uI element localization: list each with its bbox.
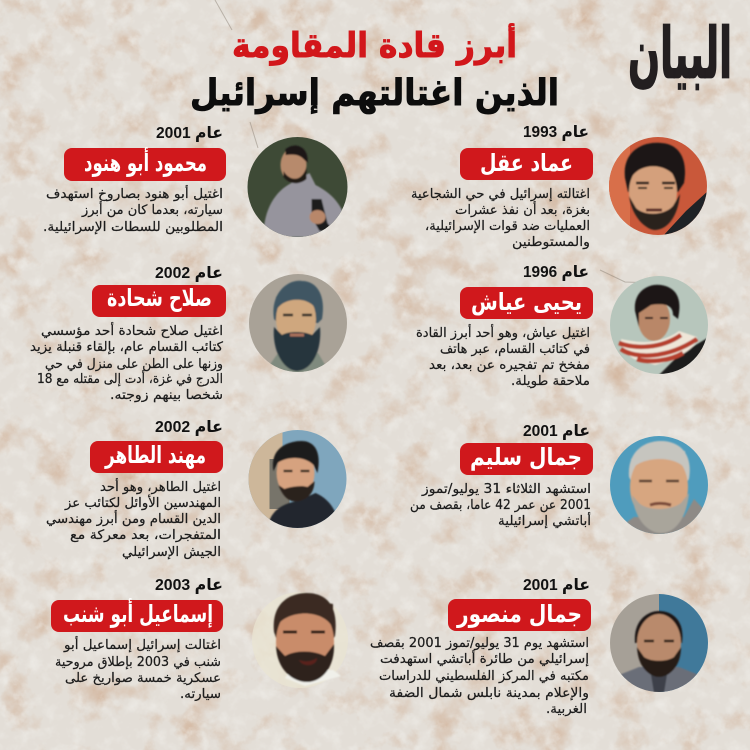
name badge: محمود أبو هنود [84,147,207,177]
title line 1: أبرز قادة المقاومة [232,23,517,66]
description [410,482,591,529]
description: والإعلام بمدينة نابلس شمال الضفة [389,686,589,701]
portrait: Ismail Abu Shanab [252,592,348,688]
portrait: Salah Shehade [248,273,348,373]
description: اغتالت إسرائيل إسماعيل أبو [63,636,221,653]
description: عسكرية خمسة صواريخ على [65,671,221,686]
description: مفخخ تم تفجيره عن بعد، بعد [429,358,590,373]
panel: Imad Aql [411,124,708,250]
name badge: جمال منصور [456,600,582,628]
description [370,636,589,717]
description: سيارته. [180,687,221,702]
year: عام 2002 [155,419,223,436]
portrait: Mahmoud Abu Hanoud [246,136,348,238]
name badge: يحيى عياش [471,288,582,316]
portrait: Imad Aql [608,136,708,236]
year: عام 1996 [523,264,589,281]
name badge [51,598,223,632]
portrait: Yahya Ayyash [609,275,709,375]
description: إسرائيلي من طائرة أباتشي استهدفت [380,650,589,667]
description: في كتائب القسام، عبر هاتف [440,342,590,357]
description: الغربية. [546,702,587,717]
description: الدرج في غزة، أدت إلى مقتله مع 18 [37,370,223,387]
description: كتائب القسام عام، بإلقاء قنبلة يزيد [30,340,224,355]
name badge: عماد عقل [480,149,573,177]
panel: Yahya Ayyash [416,264,709,389]
name badge: جمال سليم [470,443,582,471]
description [43,185,223,235]
panel: Salah Shehade [30,265,348,403]
year: عام 1993 [523,124,589,141]
panel: Jamal Mansour [370,577,709,717]
panel: Ismail Abu Shanab [51,577,348,702]
description: استشهد يوم 31 يوليو/تموز 2001 بقصف [370,636,589,651]
name badge: إسماعيل أبو شنب [63,598,213,628]
panel: Muhannad al-Taher [46,419,348,560]
logo: Al Bayan: البيان [628,13,732,94]
description: ملاحقة طويلة. [511,374,590,389]
description: المهندسين الأوائل لكتائب عز [64,494,221,511]
panel: Mahmoud Abu Hanoud [43,125,348,238]
description: شنب في 2003 بإطلاق مروحية [55,655,221,670]
name badge: صلاح شحادة [107,284,212,312]
description [411,187,590,250]
description: سيارته، بعدما كان من أبرز [81,201,223,218]
description [55,636,221,702]
description [46,478,221,560]
title line 2: الذين اغتالتهم إسرائيل [190,73,559,114]
description: اغتيل عياش، وهو أحد أبرز القادة [416,324,590,341]
description: الجيش الإسرائيلي [122,545,221,560]
name badge [90,441,223,473]
description: المتفجرات، بعد معركة مع [70,528,221,543]
description: المطلوبين للسطات الإسرائيلية. [43,220,223,235]
year: عام 2001 [523,423,590,440]
year: عام 2001 [523,577,590,594]
name badge [64,147,226,181]
description [30,322,224,403]
name badge: مهند الطاهر [104,441,206,469]
description: اغتيل صلاح شحادة أحد مؤسسي [41,322,223,339]
description: 2001 عن عمر 42 عاما، بقصف من [410,498,591,513]
description: مكتبه في المركز الفلسطيني للدراسات [379,669,589,684]
panel: Jamal Salim [410,423,709,535]
description: أباتشي إسرائيلية [498,512,591,529]
portrait: Jamal Mansour [609,593,709,693]
description: بغزة، بعد أن نفذ عشرات [455,201,590,218]
description: شخصا بينهم زوجته. [110,388,223,403]
year: عام 2003 [155,577,223,594]
year: عام 2001 [156,125,223,142]
description: الدين القسام ومن أبرز مهندسي [46,510,221,527]
description: والمستوطنين [512,235,590,250]
description: وزنها على الطن على منزل في حي [45,357,223,372]
description: العمليات ضد قوات الإسرائيلية، [425,219,590,234]
year: عام 2002 [155,265,223,282]
description: اغتيل أبو هنود بصاروخ استهدف [46,185,223,202]
description: اغتالته إسرائيل في حي الشجاعية [411,187,590,202]
name badge [92,284,226,317]
portrait: Muhannad al-Taher [248,429,348,529]
description: استشهد الثلاثاء 31 يوليو/تموز [421,482,591,497]
portrait: Jamal Salim [609,435,709,535]
title [190,23,559,114]
description: اغتيل الطاهر، وهو أحد [100,478,221,495]
description [416,324,590,389]
